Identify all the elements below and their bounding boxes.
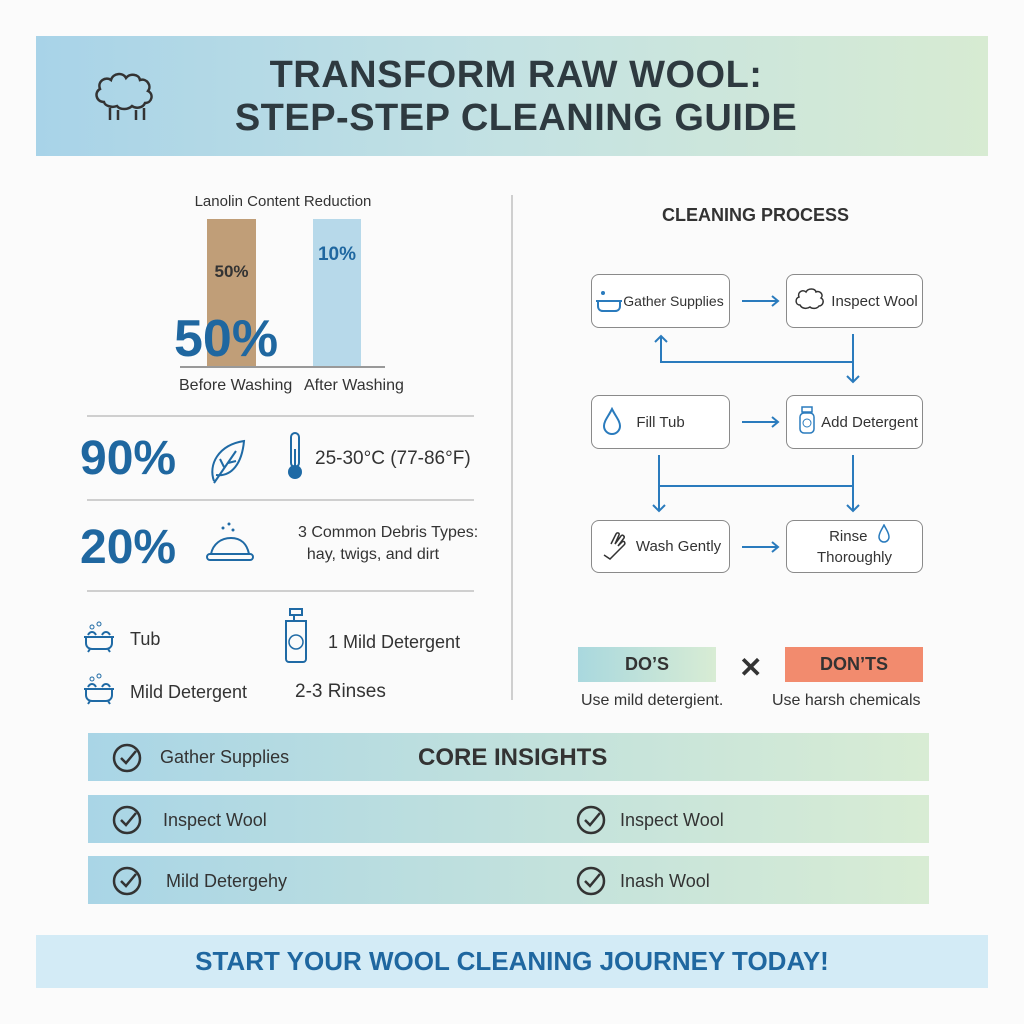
stat: 90%: 90% xyxy=(80,432,176,485)
supplies list: 2-3 Rinses xyxy=(295,681,386,702)
core insights: Mild Detergehy xyxy=(166,871,287,891)
step: rinse thoroughly: Rinse xyxy=(829,528,867,544)
core insights: Inspect Wool xyxy=(163,810,267,830)
step: wash gently xyxy=(591,520,730,573)
step: rinse thoroughly: Thoroughly xyxy=(817,548,892,566)
step: add detergent xyxy=(786,395,923,449)
step: rinse thoroughly xyxy=(786,520,923,573)
do's and don'ts: ✕ xyxy=(739,652,762,683)
stat: 90% xyxy=(80,432,471,485)
header banner xyxy=(36,36,988,156)
icon: debris pile xyxy=(206,522,254,561)
flowchart xyxy=(591,274,923,573)
chart: lanolin content reduction: 50% xyxy=(214,262,249,281)
chart: lanolin content reduction: 50% xyxy=(174,310,278,368)
core insights xyxy=(88,733,929,904)
step: fill tub: Fill Tub xyxy=(636,414,685,430)
stat: 20%: hay, twigs, and dirt xyxy=(307,546,439,563)
check icons xyxy=(112,744,142,896)
do's and don'ts: DON’TS xyxy=(820,654,888,674)
core insights: Gather Supplies xyxy=(160,747,289,767)
chart: lanolin content reduction xyxy=(174,193,404,394)
stat: 20%: 20% xyxy=(80,521,176,574)
step: fill tub xyxy=(591,395,730,449)
step: wash gently: Wash Gently xyxy=(636,538,721,555)
chart: lanolin content reduction: After Washing xyxy=(304,377,404,394)
do's and don'ts: Use harsh chemicals xyxy=(772,692,920,709)
chart: lanolin content reduction: 10% xyxy=(318,244,356,265)
supplies list: Mild Detergent xyxy=(130,682,247,702)
step: gather supplies xyxy=(591,274,730,328)
supplies list: Tub xyxy=(130,629,160,649)
chart: lanolin content reduction: Before Washing xyxy=(179,377,292,394)
do's and don'ts: DO’S xyxy=(625,654,669,674)
step: add detergent: Add Detergent xyxy=(821,414,918,430)
chart: lanolin content reduction: Lanolin Content Reduction xyxy=(195,193,371,210)
icon: detergent bottle xyxy=(285,608,307,663)
supplies list xyxy=(84,608,460,704)
step: inspect wool xyxy=(786,274,923,328)
icon: leaf xyxy=(211,440,246,484)
icon: sheep xyxy=(95,72,153,120)
stat: 20% xyxy=(80,521,478,574)
stat: 90%: 25-30°C (77-86°F) xyxy=(315,448,471,469)
footer call to action: START YOUR WOOL CLEANING JOURNEY TODAY! xyxy=(195,946,829,976)
core insights: CORE INSIGHTS xyxy=(418,744,607,771)
do's and don'ts: Use mild detergient. xyxy=(581,692,723,709)
stat: 20%: 3 Common Debris Types: xyxy=(298,524,478,541)
icon: tub xyxy=(84,622,114,652)
supplies list: 1 Mild Detergent xyxy=(328,632,460,652)
title xyxy=(235,54,797,139)
heading: cleaning process: CLEANING PROCESS xyxy=(662,205,849,225)
core insights: Inspect Wool xyxy=(620,810,724,830)
title: TRANSFORM RAW WOOL: xyxy=(270,54,762,96)
icon: thermometer xyxy=(288,432,302,479)
icons in boxes xyxy=(596,291,622,312)
core insights: Inash Wool xyxy=(620,871,710,891)
footer call to action xyxy=(36,935,988,988)
do's and don'ts xyxy=(578,647,923,709)
icon: tub 2 xyxy=(84,674,114,704)
step: inspect wool: Inspect Wool xyxy=(831,292,918,310)
step: gather supplies: Gather Supplies xyxy=(623,293,724,309)
title: STEP-STEP CLEANING GUIDE xyxy=(235,97,797,139)
